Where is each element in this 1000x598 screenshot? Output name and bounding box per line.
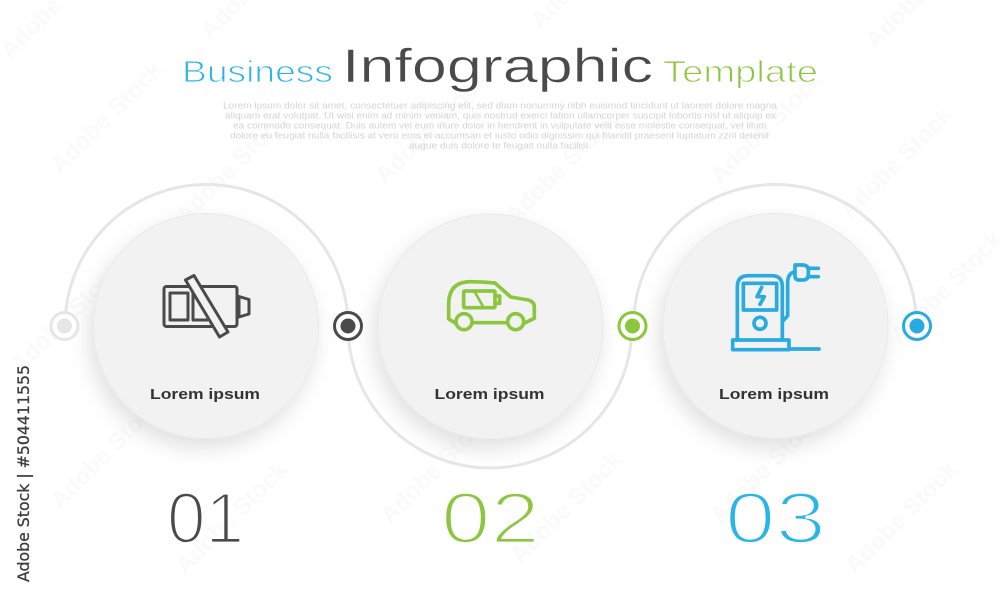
connector arcs — [65, 184, 916, 468]
infographic canvas: Adobe Stock — [705, 66, 828, 189]
panel: step 1 — [94, 214, 318, 438]
title — [182, 39, 818, 92]
infographic canvas: Adobe Stock — [705, 406, 828, 529]
intro paragraph: augue duis dolore te feugait nulla facilisi. — [409, 140, 591, 152]
infographic canvas: Adobe Stock — [505, 446, 628, 569]
intro paragraph: dolore eu feugiat nulla facilisis at vero eros et accumsan et iusto odio dignissim qui blandit praesent luptatum zzril delenit — [230, 130, 769, 142]
infographic canvas: Adobe Stock — [5, 256, 128, 379]
icon: charging station with plug — [733, 265, 819, 350]
title word: Business: Business — [182, 54, 333, 89]
infographic canvas: Adobe Stock — [375, 406, 498, 529]
step 2 circle — [378, 214, 603, 439]
timeline marker: step 3 — [904, 312, 930, 340]
icon: electric car with battery — [449, 282, 534, 330]
step 1 circle — [94, 214, 318, 438]
intro paragraph: ea commodo consequat. Duis autem vel eum iriure dolor in hendrerit in vulputate velit esse molestie consequat, vel illum — [233, 120, 767, 132]
infographic canvas: Adobe Stock — [370, 66, 493, 189]
stock id sidebar: Adobe Stock | #504411555 — [14, 365, 33, 582]
infographic canvas: Adobe Stock — [500, 106, 623, 229]
timeline marker: start — [51, 312, 78, 340]
intro paragraph — [223, 100, 778, 152]
number 03: 03 — [725, 479, 826, 559]
intro paragraph: aliquam erat volutpat. Ut wisi enim ad minim veniam, quis nostrud exerci tation ullamcorper suscipit lobortis nisl ut aliquip ex — [225, 110, 776, 122]
step 1 label: Lorem ipsum — [150, 386, 260, 403]
infographic canvas: Adobe Stock — [835, 101, 958, 224]
step 3 label: Lorem ipsum — [719, 386, 829, 403]
panel: step 3 — [663, 214, 888, 438]
number 02: 02 — [441, 479, 540, 559]
infographic canvas: Adobe Stock — [45, 391, 168, 514]
title word: Infographic: Infographic — [342, 39, 653, 92]
infographic canvas: Adobe Stock — [840, 456, 963, 579]
timeline marker: step 1 — [334, 312, 362, 340]
infographic canvas: Adobe Stock — [170, 456, 293, 579]
icon: crossed-out battery — [164, 276, 249, 337]
title word: Template: Template — [663, 54, 818, 89]
infographic canvas: Adobe Stock — [170, 106, 293, 229]
infographic canvas: Adobe Stock — [45, 56, 168, 179]
step 3 circle — [663, 214, 888, 438]
step 2 label: Lorem ipsum — [434, 386, 544, 403]
number 01: 01 — [167, 479, 244, 559]
intro paragraph: Lorem ipsum dolor sit amet, consectetuer adipiscing elit, sed diam nonummy nibh euismod tincidunt ut laoreet dolore magna — [223, 100, 778, 112]
timeline marker: step 2 — [619, 312, 646, 340]
panel: step 2 — [378, 214, 603, 439]
